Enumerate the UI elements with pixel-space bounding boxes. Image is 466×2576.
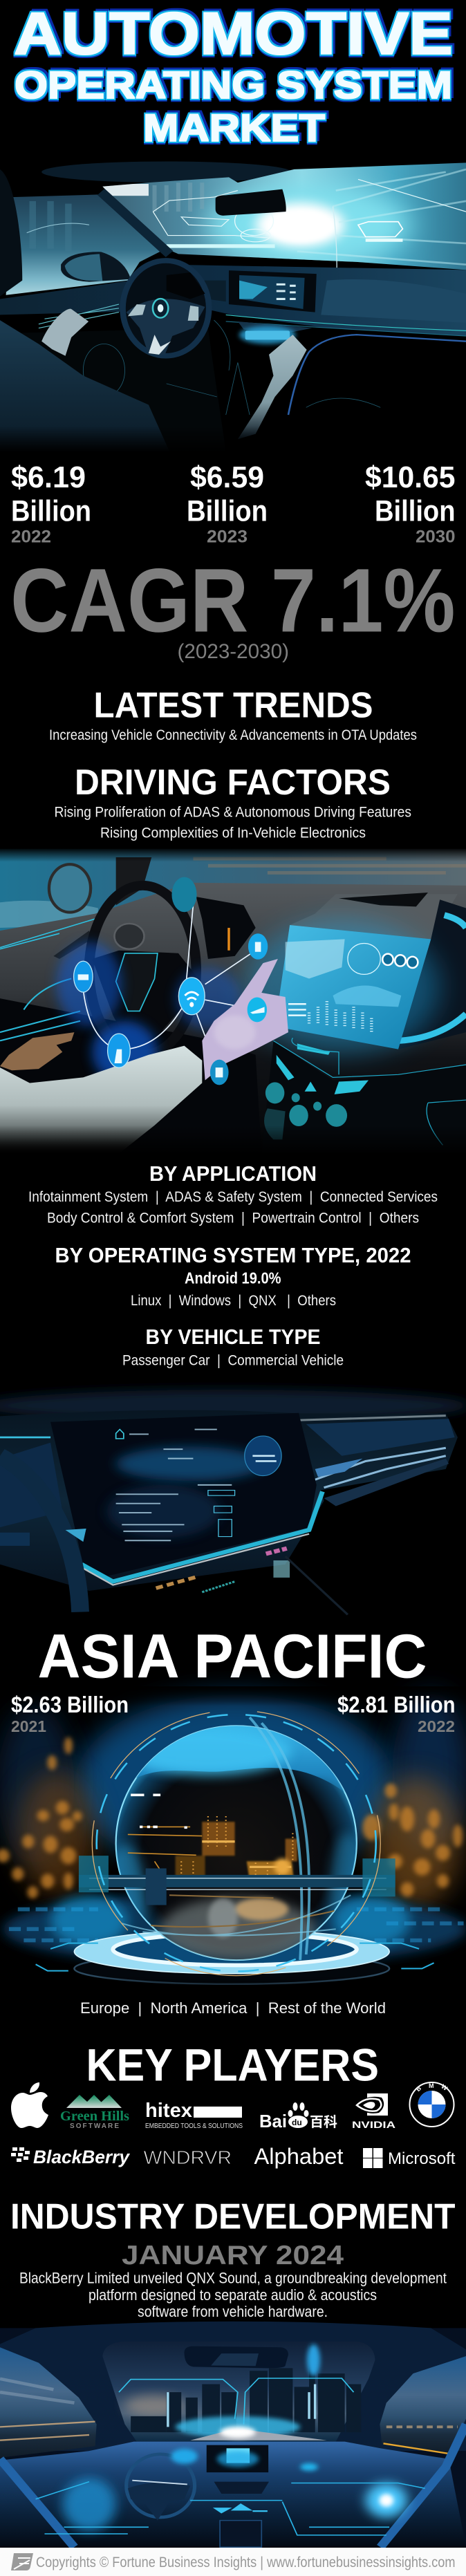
image: glowing globe — [0, 1686, 466, 1998]
image: hand touching infotainment screen — [0, 848, 466, 1155]
by application: Body Control & Comfort System | Powertrain Control | Others — [47, 1210, 419, 1226]
logo: NVIDIA — [352, 2093, 395, 2130]
by vehicle type: BY VEHICLE TYPE — [145, 1325, 321, 1349]
by operating system type: Android 19.0% — [185, 1269, 281, 1287]
heading: Asia Pacific: ASIA PACIFIC — [37, 1622, 427, 1691]
logo: Wind River: WNDRVR — [144, 2147, 232, 2168]
logo: Alphabet: Alphabet — [254, 2144, 344, 2169]
industry development: INDUSTRY DEVELOPMENT — [10, 2197, 456, 2237]
heading: key players: KEY PLAYERS — [86, 2040, 379, 2091]
image: driver in connected car interior — [0, 161, 466, 452]
image: windshield view of night city — [0, 2322, 466, 2547]
stat 2023: $6.59 — [190, 460, 264, 494]
title: OPERATING SYSTEM — [15, 63, 452, 106]
stat 2022: 2022 — [11, 527, 51, 546]
logo: Microsoft — [363, 2148, 456, 2168]
stat 2023: Billion — [187, 495, 268, 528]
title: AUTOMOTIVE — [14, 1, 453, 67]
stat 2022: Billion — [11, 495, 91, 528]
logo: Green Hills Software: Green Hills — [60, 2109, 129, 2124]
logo: BMW: B — [415, 2084, 423, 2093]
title: MARKET — [143, 106, 325, 149]
stat 2030: $10.65 — [365, 460, 455, 494]
value 2021: $2.63 Billion — [11, 1692, 129, 1717]
value 2021: 2021 — [11, 1717, 46, 1735]
latest trends: LATEST TRENDS — [94, 686, 373, 726]
logo: Baidu Baike — [259, 2102, 337, 2131]
driving factors: DRIVING FACTORS — [75, 763, 391, 803]
industry development: platform designed to separate audio & acoustics — [88, 2286, 377, 2304]
by operating system type: Linux | Windows | QNX | Others — [131, 1293, 336, 1309]
title — [14, 1, 453, 149]
stat 2023 — [187, 460, 268, 546]
logo: Green Hills Software — [60, 2095, 129, 2130]
CAGR: (2023-2030) — [177, 640, 289, 663]
driving factors: Rising Complexities of In-Vehicle Electronics — [100, 825, 366, 841]
value 2022 — [337, 1692, 455, 1735]
by operating system type — [55, 1243, 411, 1309]
logo: Baidu Baike: du — [292, 2118, 302, 2127]
logo: BlackBerry: BlackBerry — [33, 2147, 131, 2167]
logo: BMW — [409, 2082, 454, 2127]
industry development: JANUARY 2024 — [122, 2241, 344, 2270]
logo: Baidu Baike: Bai — [259, 2111, 287, 2131]
other regions: Europe | North America | Rest of the World — [80, 1999, 386, 2017]
driving factors: Rising Proliferation of ADAS & Autonomous Driving Features — [54, 805, 411, 820]
driving factors — [54, 763, 411, 841]
logo: Baidu Baike: 百科 — [310, 2114, 337, 2130]
industry development: software from vehicle hardware. — [138, 2303, 328, 2320]
stat 2030 — [365, 460, 455, 546]
value 2022: 2022 — [418, 1717, 455, 1735]
by application — [28, 1161, 438, 1226]
logo: BMW: M — [429, 2082, 434, 2089]
value 2021 — [11, 1692, 129, 1735]
Asia Pacific values — [11, 1692, 455, 1735]
logo: hitex: EMBEDDED TOOLS & SOLUTIONS — [145, 2122, 243, 2130]
by vehicle type — [122, 1325, 344, 1369]
footer logo — [11, 2553, 33, 2570]
logo: hitex — [145, 2100, 243, 2130]
stat 2022: $6.19 — [11, 460, 86, 494]
latest trends: Increasing Vehicle Connectivity & Advancements in OTA Updates — [49, 727, 417, 743]
market size stats — [11, 460, 455, 546]
by application: BY APPLICATION — [149, 1161, 317, 1186]
stat 2022 — [11, 460, 91, 546]
logo: Microsoft: Microsoft — [388, 2149, 456, 2168]
by operating system type: BY OPERATING SYSTEM TYPE, 2022 — [55, 1243, 411, 1267]
footer — [0, 2548, 466, 2576]
stat 2023: 2023 — [207, 527, 248, 546]
latest trends — [49, 686, 417, 743]
image: digital dashboard display — [0, 1390, 466, 1614]
industry development — [10, 2197, 456, 2320]
by vehicle type: Passenger Car | Commercial Vehicle — [122, 1352, 344, 1369]
logo: NVIDIA: NVIDIA — [352, 2119, 395, 2130]
logo: Green Hills Software: SOFTWARE — [70, 2122, 119, 2130]
logo: Apple — [11, 2082, 48, 2128]
stat 2030: Billion — [375, 495, 455, 528]
logo: hitex: hitex — [145, 2100, 192, 2122]
stat 2030: 2030 — [416, 527, 455, 546]
logo: BMW: W — [440, 2083, 449, 2092]
